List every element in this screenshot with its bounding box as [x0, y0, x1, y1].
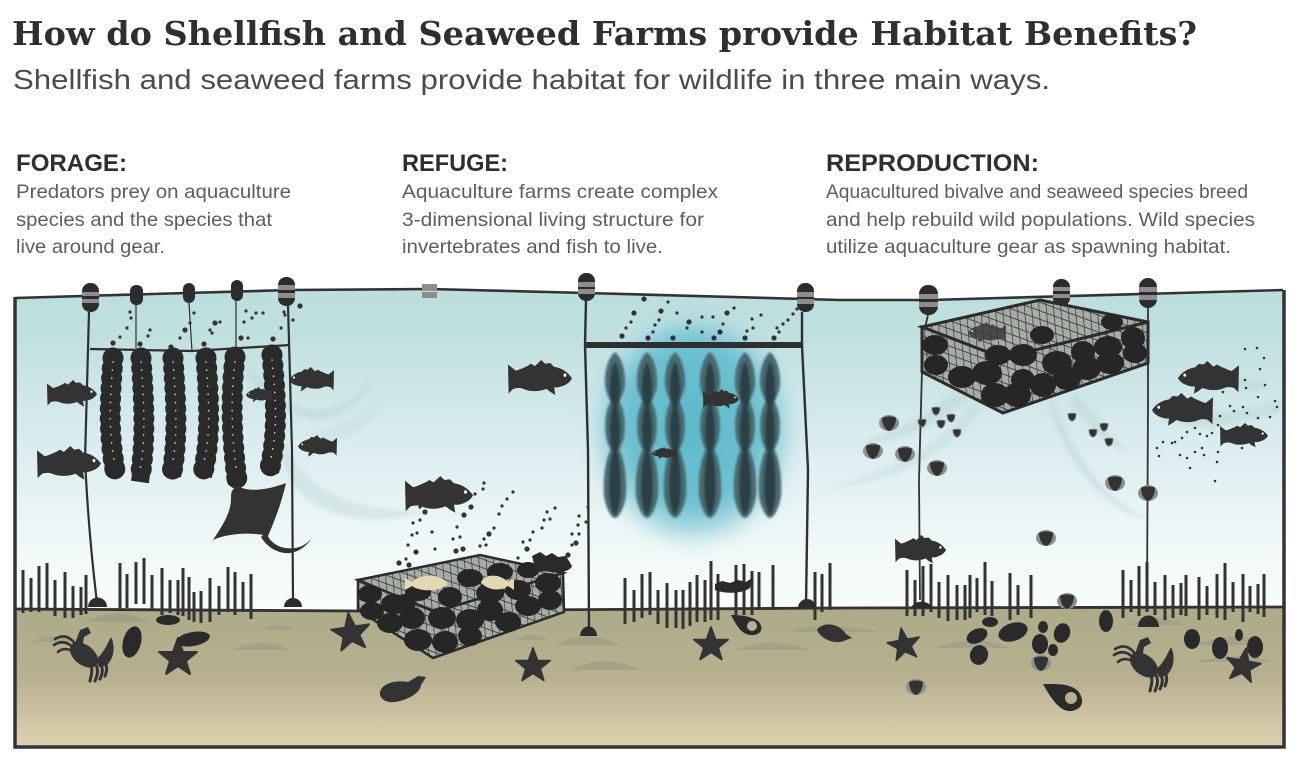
seaweed farm glow — [581, 315, 805, 575]
mooring anchors — [88, 598, 1159, 636]
text block: forage: species and the species that — [16, 209, 273, 231]
text block: forage: Predators prey on aquaculture — [16, 181, 291, 203]
seaweed farm lines — [584, 300, 808, 630]
seabed mounds — [32, 614, 1272, 670]
seabed background — [15, 607, 1283, 747]
text block: forage: FORAGE: — [16, 150, 127, 177]
mussel ropes — [110, 351, 276, 484]
starfish — [159, 611, 1263, 683]
bubbles above ropes — [113, 306, 300, 347]
frame and water surface — [15, 289, 1284, 747]
crabs — [54, 627, 1174, 691]
text block: refuge: invertebrates and fish to live. — [402, 236, 663, 258]
oysters in cage — [922, 314, 1147, 407]
cage top — [922, 300, 1148, 358]
bubbles above seaweed bar — [622, 299, 797, 338]
seaweed blades — [604, 352, 781, 518]
farm lines — [85, 301, 293, 604]
text block: refuge: 3-dimensional living structure for — [402, 209, 705, 231]
text block: reproduction — [826, 150, 1255, 258]
fish — [37, 360, 1268, 564]
large buoys — [82, 273, 1157, 315]
cage sides — [358, 573, 564, 658]
text block: forage: live around gear. — [16, 236, 165, 258]
manta ray — [213, 483, 312, 553]
text block: refuge — [402, 150, 718, 258]
text block: forage — [16, 150, 291, 258]
text block: reproduction: REPRODUCTION: — [826, 150, 1039, 177]
bubbles above bottom cage — [399, 483, 588, 565]
cage sides — [922, 322, 1148, 413]
crusted fish in eelgrass — [715, 578, 752, 593]
eelgrass beds — [23, 558, 1264, 629]
crusted fish on cage — [532, 552, 572, 572]
larvae cloud — [1157, 348, 1277, 481]
cage top — [358, 555, 563, 612]
text block: reproduction: and help rebuild wild populations. Wild species — [826, 209, 1255, 231]
mussel rope farm — [85, 301, 300, 604]
oysters in cage — [358, 562, 562, 653]
pale fish in cage — [405, 576, 448, 590]
text block: refuge: REFUGE: — [402, 150, 508, 177]
water background — [15, 289, 1283, 611]
text block: reproduction: utilize aquaculture gear as spawning habitat. — [826, 236, 1231, 258]
small shell spat — [863, 407, 1158, 695]
text block: reproduction: Aquacultured bivalve and seaweed species breed — [826, 181, 1248, 203]
small buoys — [130, 280, 243, 305]
grey marker — [422, 284, 437, 298]
title: How do Shellfish and Seaweed Farms provide Habitat Benefits? — [12, 14, 1197, 53]
mussels on seabed — [119, 610, 1263, 667]
fish in cage — [968, 322, 1006, 343]
buoys — [82, 273, 1157, 315]
current plumes — [248, 360, 1280, 520]
whelk shells — [731, 615, 1082, 711]
flatfish — [380, 624, 852, 702]
text block: refuge: Aquaculture farms create complex — [402, 181, 718, 203]
cage lines — [919, 308, 1148, 600]
suspended oyster cage — [919, 300, 1148, 600]
subtitle: Shellfish and seaweed farms provide habitat for wildlife in three main ways. — [13, 64, 1050, 95]
bottom oyster cage — [358, 552, 572, 658]
